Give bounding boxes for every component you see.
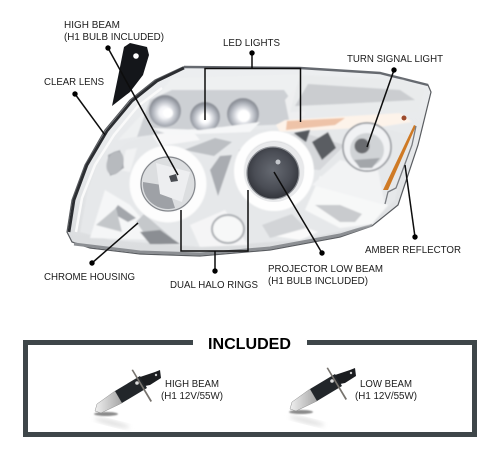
icon: high beam bulb xyxy=(94,370,161,430)
label: dual halo rings: DUAL HALO RINGS xyxy=(170,280,258,291)
text: low beam spec: LOW BEAM xyxy=(360,379,412,390)
label: chrome housing: CHROME HOUSING xyxy=(44,272,135,283)
callout: dual halo rings bracket xyxy=(181,190,248,274)
label: turn signal light: TURN SIGNAL LIGHT xyxy=(347,54,443,65)
dark lens rim xyxy=(69,68,184,232)
outer housing xyxy=(67,67,431,256)
upper right clear panel xyxy=(290,75,425,112)
upper LED lens bulbs xyxy=(137,82,305,137)
chrome background xyxy=(80,125,410,247)
callout: projector low beam xyxy=(274,172,325,256)
callout: turn signal xyxy=(367,67,397,147)
panel frame xyxy=(26,342,474,434)
label: LED lights: LED LIGHTS xyxy=(223,38,280,49)
text: low beam spec xyxy=(355,379,417,402)
right halo ring with projector low beam xyxy=(239,136,309,206)
panel: included xyxy=(26,336,474,434)
left halo ring with high beam xyxy=(135,151,201,217)
callout: amber reflector xyxy=(405,165,418,240)
label: clear lens: CLEAR LENS xyxy=(44,77,104,88)
label: high beam: HIGH BEAM xyxy=(64,20,120,31)
callout: clear lens xyxy=(72,91,105,135)
label: high beam bulb note: (H1 BULB INCLUDED) xyxy=(64,32,164,43)
label: amber reflector: AMBER REFLECTOR xyxy=(365,245,461,256)
callout lines xyxy=(72,45,418,274)
label: projector low beam: PROJECTOR LOW BEAM xyxy=(268,264,383,275)
amber reflector strip xyxy=(383,125,416,190)
text: high beam spec: HIGH BEAM xyxy=(165,379,219,390)
callout: LED lights bracket xyxy=(205,50,300,122)
text: low beam spec: (H1 12V/55W) xyxy=(355,391,417,402)
mounting bracket xyxy=(112,43,149,106)
upper clear lens area xyxy=(118,74,300,140)
text: high beam spec xyxy=(161,379,223,402)
heading: included: INCLUDED xyxy=(208,336,291,353)
side marker xyxy=(103,149,127,177)
turn signal reflector xyxy=(294,123,391,171)
bottom lower reflector xyxy=(212,215,244,243)
label: projector bulb note: (H1 BULB INCLUDED) xyxy=(268,276,368,287)
callout: chrome housing xyxy=(89,223,138,266)
callout: high beam xyxy=(105,45,178,175)
icon: low beam bulb xyxy=(289,368,356,428)
amber LED strip xyxy=(276,113,412,132)
text: high beam spec: (H1 12V/55W) xyxy=(161,391,223,402)
headlight assembly xyxy=(67,43,431,256)
